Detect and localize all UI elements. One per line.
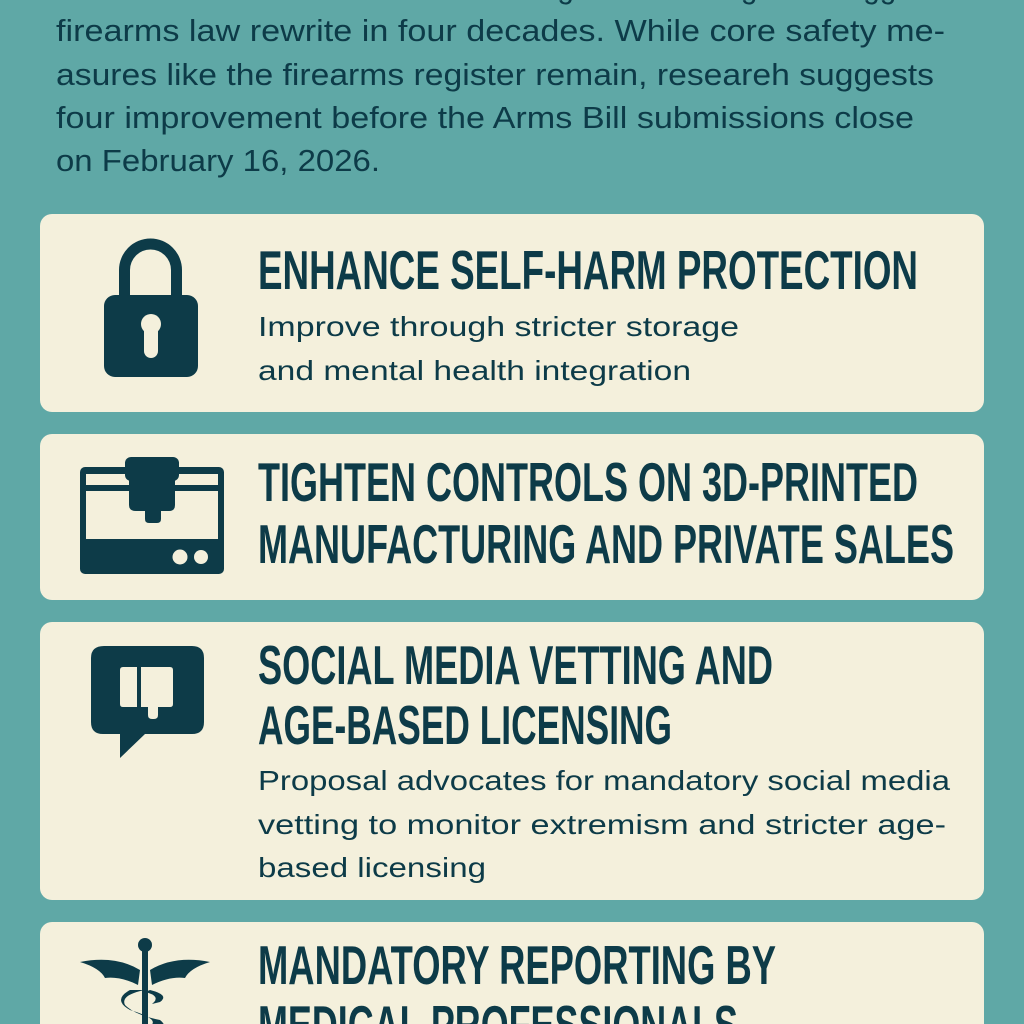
icon: speech bubble	[91, 646, 204, 758]
heading	[258, 934, 776, 1024]
description: Improve through stricter storage	[258, 311, 739, 342]
intro text: four improvement before the Arms Bill submissions close	[56, 100, 914, 135]
heading: MANDATORY REPORTING BY	[258, 934, 776, 996]
panel: 3D printing	[40, 434, 984, 600]
description: based licensing	[258, 852, 486, 883]
description: Proposal advocates for mandatory social media	[258, 765, 951, 796]
intro text	[56, 0, 945, 178]
panel: self-harm protection	[40, 214, 984, 412]
heading	[258, 451, 954, 575]
description	[258, 311, 739, 386]
icon: caduceus	[80, 938, 210, 1024]
icon: padlock	[104, 239, 198, 377]
description: vetting to monitor extremism and stricter age-	[258, 809, 946, 840]
panel: social media vetting	[40, 622, 984, 900]
intro text: on February 16, 2026.	[56, 143, 380, 178]
heading: AGE-BASED LICENSING	[258, 694, 672, 756]
panel: medical reporting	[40, 922, 984, 1024]
heading: SOCIAL MEDIA VETTING AND	[258, 634, 773, 696]
description: and mental health integration	[258, 355, 691, 386]
description	[258, 765, 951, 883]
heading	[258, 634, 773, 756]
intro text: firearms law rewrite in four decades. While core safety me-	[56, 13, 945, 48]
icon: 3D printer	[80, 457, 224, 574]
intro text: asures like the firearms register remain, researeh suggests	[56, 57, 934, 92]
